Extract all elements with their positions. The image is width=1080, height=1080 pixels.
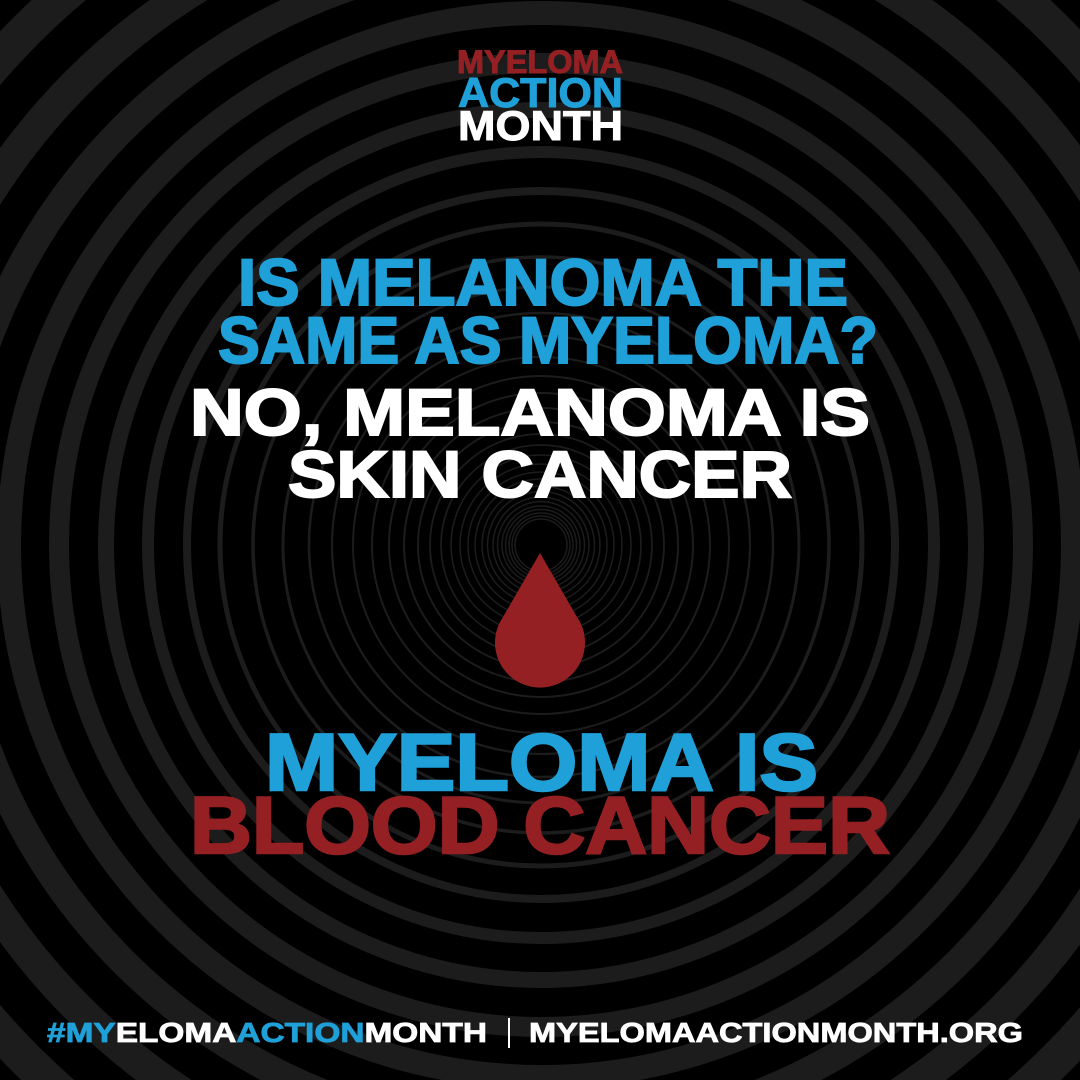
logo: MONTH — [458, 102, 623, 149]
footer: MYELOMAACTIONMONTH.ORG — [529, 1017, 1023, 1048]
answer: SKIN CANCER — [288, 437, 792, 511]
statement: MYELOMA IS — [265, 718, 818, 808]
question: SAME AS MYELOMA? — [218, 303, 878, 377]
footer — [47, 1017, 1023, 1048]
icon: blood drop — [495, 553, 585, 688]
answer — [190, 375, 870, 511]
answer: NO, MELANOMA IS — [190, 375, 870, 449]
logo — [457, 44, 623, 149]
question: IS MELANOMA THE — [238, 245, 848, 319]
statement: BLOOD CANCER — [190, 781, 890, 871]
statement — [190, 718, 890, 871]
footer: #MY ELOMA ACTION MONTH — [47, 1017, 487, 1048]
logo: MYELOMA — [457, 44, 623, 80]
question — [218, 245, 878, 377]
logo: ACTION — [458, 69, 623, 116]
